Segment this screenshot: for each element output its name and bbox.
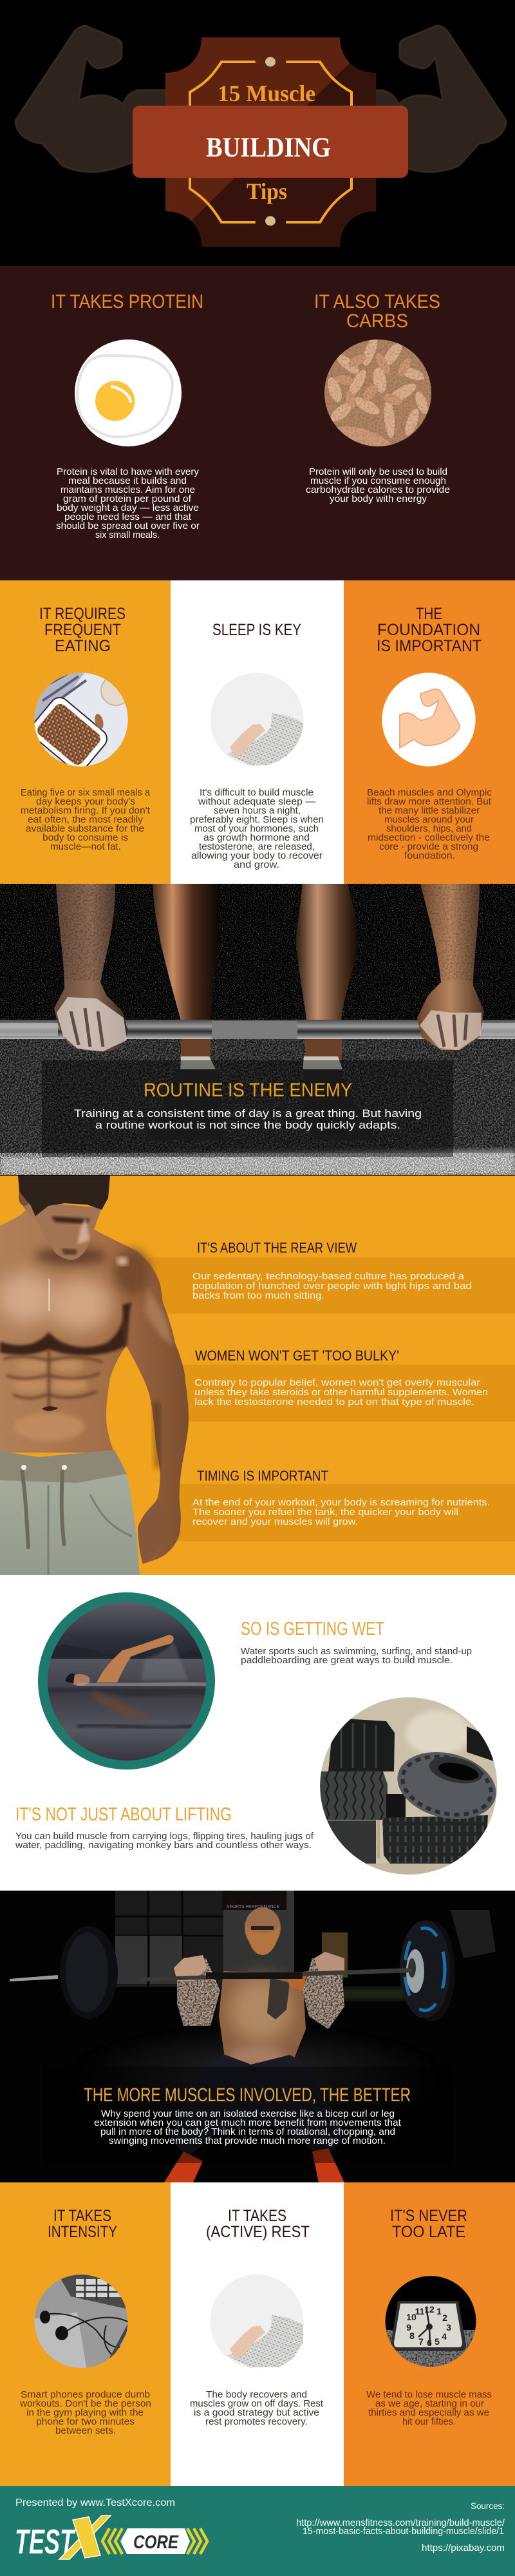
text: timing body: The sooner you refuel the tank, the quicker your body will — [192, 1507, 458, 1518]
text: rest body: is a good strategy but active — [194, 2408, 319, 2418]
heading: the foundation is important: THE — [416, 605, 442, 623]
heading: it's never too late: TOO LATE — [392, 2223, 465, 2241]
panel: protein and carbs — [0, 266, 515, 580]
text: eating body: eat often, the most readily — [28, 815, 144, 825]
text: timing body — [192, 1497, 490, 1527]
text: rest body: muscles grow on off days. Rest — [190, 2399, 323, 2409]
text: intensity body: phone for two minutes — [36, 2417, 135, 2427]
logo: TestX Core: TEST — [15, 2523, 76, 2561]
text: sleep body: as growth hormone and — [203, 833, 310, 843]
dark text plate — [152, 2066, 363, 2163]
heading: not just about lifting: IT'S NOT JUST ABOUT LIFTING — [15, 1804, 232, 1825]
text: protein body: should be spread out over five or — [56, 521, 200, 531]
text: sleep body: testosterone, are released, — [199, 842, 315, 852]
heading: it takes intensity: IT TAKES — [53, 2207, 111, 2225]
header: title badge with flexing arms — [15, 26, 506, 258]
text: foundation body — [367, 788, 492, 861]
photo: barbell front squat: SPORTS PERFORMANCE — [227, 1905, 279, 1909]
text: carbs body — [306, 467, 450, 504]
heading: it also takes carbs: IT ALSO TAKES — [314, 291, 440, 312]
panel: the more muscles involved — [0, 1891, 515, 2182]
text: foundation body: Beach muscles and Olympic — [367, 788, 492, 798]
photo: alarm clock: 9 — [406, 2322, 411, 2333]
text: routine body — [74, 1107, 422, 1131]
heading: it takes intensity — [48, 2207, 117, 2241]
text: intensity body: between sets. — [55, 2426, 116, 2436]
title banner — [133, 106, 408, 178]
panel: three columns — intensity, rest, never too late — [0, 2182, 515, 2486]
text: too bulky body: lack the testosterone needed to put on that type of muscle. — [194, 1397, 474, 1407]
photo: alarm clock: 3 — [446, 2322, 451, 2333]
text: foundation body: lifts draw more attention. But — [367, 797, 491, 807]
heading: it takes active rest — [206, 2207, 310, 2241]
text: sleep body: It's difficult to build muscle — [200, 788, 314, 798]
icon: flexed arm — [382, 673, 476, 767]
photo: stacked tires — [319, 1696, 503, 1878]
band: too bulky — [174, 1364, 515, 1422]
text: eating body: metabolism firing. If you don't — [21, 806, 150, 816]
lifter: tattoos on chest — [267, 1978, 290, 2019]
text: routine body: Training at a consistent time of day is a great thing. But having — [74, 1107, 422, 1120]
text: rear view body: Our sedentary, technology-based culture has produced a — [192, 1271, 465, 1282]
icon: left flexed arm — [15, 26, 167, 172]
photo: meal dish — [34, 673, 128, 767]
text: foundation body: shoulders, hips, and — [386, 824, 472, 834]
text: rear view body: population of hunched over people with tight hips and bad — [192, 1281, 472, 1292]
text: sources — [296, 2501, 505, 2553]
photo: barbell front squat — [0, 1891, 515, 2182]
text: muscles body: Why spend your time on an isolated exercise like a bicep curl or leg — [101, 2108, 395, 2119]
text: intensity body — [19, 2390, 151, 2436]
dark text plate — [42, 1060, 453, 1157]
photo: alarm clock: 12 — [424, 2304, 435, 2314]
man: neck and face — [20, 1200, 102, 1260]
text: intensity body: in the gym playing with the — [26, 2408, 144, 2418]
text: protein body: six small meals. — [95, 530, 160, 540]
text: rest body: rest promotes recovery. — [205, 2417, 308, 2427]
heading: it's never too late: IT'S NEVER — [390, 2207, 467, 2225]
text: sources: Sources: — [471, 2501, 505, 2511]
text: muscles body — [94, 2108, 402, 2146]
heading: it also takes carbs — [314, 291, 440, 332]
heading: it takes active rest: IT TAKES — [228, 2207, 286, 2225]
photo: athlete gripping barbell — [0, 884, 515, 1175]
text: carbs body: Protein will only be used to build — [309, 467, 447, 477]
photo: alarm clock: 11 — [415, 2306, 425, 2316]
panel: three columns — eating, sleep, foundation — [0, 580, 515, 884]
lifter: red shoes — [164, 2151, 203, 2182]
text: eating body: muscle—not fat. — [50, 842, 121, 852]
text: protein body: body weight a day — less active — [57, 503, 199, 513]
heading: the foundation is important — [377, 605, 482, 655]
text: never too late body: We tend to lose muscle mass — [366, 2390, 492, 2400]
band: rear view — [148, 1257, 515, 1314]
title line: Tips: Tips — [247, 178, 287, 204]
text: intensity body: workouts. Don't be the person — [19, 2399, 151, 2409]
text: foundation body: core - provide a strong — [379, 842, 478, 852]
icon: right flexed arm — [373, 26, 506, 172]
text: sleep body: preferably eight. Sleep is when — [190, 815, 324, 825]
heading: it requires frequent eating: FREQUENT — [44, 621, 121, 639]
column: sleep — [171, 580, 344, 884]
panel: routine is the enemy — [0, 884, 515, 1175]
text: sleep body: allowing your body to recover — [191, 851, 323, 861]
text: muscles body: swinging movements that provide much more range of motion. — [109, 2135, 386, 2146]
title line: BUILDING: BUILDING — [206, 133, 331, 163]
text: too bulky body: Contrary to popular belief, women won't get overly muscular — [194, 1377, 480, 1388]
photo: alarm clock: 7 — [418, 2336, 424, 2347]
heading: sleep is key: SLEEP IS KEY — [212, 621, 301, 639]
text: carbs body: muscle if you consume enough — [310, 476, 446, 486]
lifter: shorts — [171, 2055, 348, 2158]
text: lifting body — [15, 1831, 314, 1851]
text: protein body — [56, 467, 200, 540]
photo: sleeping person — [210, 673, 304, 767]
photo: alarm clock: 4 — [442, 2331, 447, 2342]
text: rear view body: backs from too much sitting. — [192, 1290, 324, 1301]
icon: fried egg — [75, 339, 182, 446]
heading: it also takes carbs: CARBS — [346, 310, 408, 332]
panel: water sports and lifting alternatives — [0, 1575, 515, 1891]
photo: swimmer in teal ring — [38, 1592, 215, 1770]
logo: TestX Core: CORE — [133, 2532, 179, 2553]
band: timing — [174, 1484, 515, 1541]
text: eating body: Eating five or six small meals a — [21, 788, 151, 798]
text: eating body: available substance for the — [26, 824, 144, 834]
column: frequent eating — [0, 580, 171, 884]
text: wet body: paddleboarding are great ways to build muscle. — [241, 1655, 453, 1666]
text: never too late body: hit our fifties. — [402, 2417, 456, 2427]
text: wet body: Water sports such as swimming, surfing, and stand-up — [241, 1646, 472, 1657]
text: foundation body: muscles around your — [384, 815, 474, 825]
photo: resting person — [210, 2275, 304, 2368]
text: protein body: Protein is vital to have with every — [57, 467, 200, 477]
text: sleep body: seven hours a night, — [214, 806, 301, 816]
text: routine body: a routine workout is not since the body quickly adapts. — [95, 1119, 400, 1131]
text: rear view body — [192, 1271, 472, 1301]
photo: alarm clock: 10 — [406, 2312, 417, 2322]
heading: so is getting wet: SO IS GETTING WET — [241, 1619, 384, 1639]
photo: alarm clock: 1 — [436, 2306, 442, 2316]
text: presented by: Presented by www.TestXcore.com — [15, 2497, 175, 2508]
text: lifting body: You can build muscle from carrying logs, flipping tires, hauling jugs of — [15, 1831, 314, 1842]
photo: earphones — [32, 2274, 129, 2371]
text: protein body: maintains muscles. Aim for one — [61, 485, 195, 495]
text: foundation body: foundation. — [404, 851, 455, 861]
text: intensity body: Smart phones produce dumb — [21, 2390, 150, 2400]
text: sources: http://www.mensfitness.com/training/build-muscle/ — [296, 2518, 505, 2528]
column: active rest — [171, 2182, 344, 2486]
text: carbs body: carbohydrate calories to provide — [306, 485, 450, 495]
panel: rear view, bulky, timing — [0, 1176, 515, 1575]
text: rest body: The body recovers and — [206, 2390, 307, 2400]
text: sleep body: and grow. — [234, 860, 279, 870]
column: never too late — [344, 2182, 515, 2486]
lifter: barbell — [142, 1968, 412, 1981]
text: timing body: At the end of your workout, your body is screaming for nutrients. — [192, 1497, 490, 1508]
heading: the foundation is important: IS IMPORTANT — [377, 637, 482, 655]
text: sleep body — [190, 788, 324, 870]
text: eating body — [21, 788, 151, 852]
badge ornaments — [265, 57, 276, 225]
text: foundation body: the many little stabilizer — [379, 806, 480, 816]
heading: it requires frequent eating: IT REQUIRES — [39, 605, 126, 623]
heading: it requires frequent eating — [39, 605, 126, 655]
column: foundation — [344, 580, 515, 884]
heading: it takes active rest: (ACTIVE) REST — [206, 2223, 310, 2241]
text: carbs body: your body with energy — [330, 494, 427, 504]
text: wet body — [241, 1646, 472, 1666]
text: muscles body: pull in more of the body? Think in terms of rotational, chopping, and — [100, 2126, 395, 2137]
heading: too bulky: WOMEN WON'T GET 'TOO BULKY' — [195, 1348, 399, 1364]
text: muscles body: extension when you can get much more benefit from movements that — [94, 2117, 402, 2128]
photo: alarm clock: 2 — [442, 2313, 447, 2323]
text: never too late body — [366, 2390, 492, 2427]
title line: 15 Muscle: 15 Muscle — [218, 81, 315, 106]
text: sleep body: without adequate sleep — — [198, 797, 316, 807]
text: sources: https://pixabay.com — [422, 2543, 505, 2553]
text: eating body: day keeps your body's — [36, 797, 135, 807]
badge frame — [190, 62, 351, 222]
lifter: tattooed arms — [177, 1958, 344, 2029]
text: too bulky body: unless they take steroids or other harmful supplements. Women — [194, 1387, 488, 1398]
heading: timing: TIMING IS IMPORTANT — [197, 1467, 328, 1484]
text: sleep body: most of your hormones, such — [194, 824, 319, 834]
heading: routine is the enemy: ROUTINE IS THE ENEMY — [144, 1080, 352, 1101]
text: too bulky body — [194, 1377, 488, 1407]
footer — [0, 2486, 515, 2576]
photo: sweet potatoes — [324, 339, 431, 446]
lifter: hands — [174, 1955, 207, 1981]
photo: alarm clock — [385, 2276, 476, 2367]
text: never too late body: as we age, starting in our — [375, 2399, 484, 2409]
text: protein body: gram of protein per pound of — [63, 494, 192, 504]
badge plate — [165, 37, 376, 247]
heading: the more muscles involved: THE MORE MUSCLES INVOLVED, THE BETTER — [84, 2085, 411, 2106]
heading: it takes intensity: INTENSITY — [48, 2223, 117, 2241]
heading: the foundation is important: FOUNDATION — [377, 621, 480, 639]
man: hair — [18, 1176, 110, 1216]
photo: alarm clock: 8 — [409, 2331, 415, 2341]
photo: alarm clock: 5 — [435, 2336, 440, 2347]
text: never too late body: thirties and especially as we — [368, 2408, 489, 2418]
text: protein body: people need less — and that — [64, 512, 191, 522]
heading: rear view: IT'S ABOUT THE REAR VIEW — [197, 1239, 357, 1256]
text: rest body — [190, 2390, 323, 2427]
text: sources: 15-most-basic-facts-about-building-muscle/slide/1 — [303, 2526, 504, 2537]
text: timing body: recover and your muscles will grow. — [192, 1516, 358, 1527]
heading: it requires frequent eating: EATING — [55, 637, 111, 655]
lifter: head and beard — [245, 1907, 281, 1942]
text: foundation body: midsection - collectively the — [368, 833, 490, 843]
lifter: torso — [219, 1971, 306, 2061]
photo: alarm clock: 6 — [427, 2338, 432, 2348]
text: eating body: body to consume is — [42, 833, 128, 843]
logo: TestX Core — [15, 2515, 207, 2561]
photo: muscular man — [0, 1176, 189, 1575]
text: protein body: meal because it builds and — [68, 476, 187, 486]
man: sweatpants — [0, 1450, 140, 1575]
column: intensity — [0, 2182, 171, 2486]
heading: it's never too late — [390, 2207, 467, 2241]
heading: it takes protein: IT TAKES PROTEIN — [51, 291, 203, 312]
text: lifting body: water, paddling, navigating monkey bars and countless other ways. — [15, 1840, 312, 1851]
